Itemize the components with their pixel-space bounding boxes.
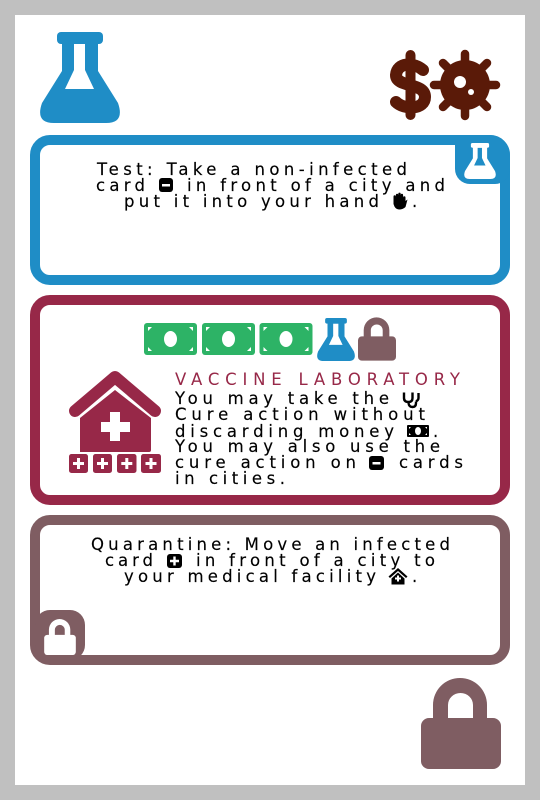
text: quarantine rule: .: [412, 567, 417, 586]
panel: quarantine: [35, 520, 505, 660]
text: vaccine laboratory rule: cure action on: [175, 453, 356, 472]
text: quarantine rule: your medical facility: [124, 567, 376, 586]
text: test rule: in front of a city and: [187, 176, 445, 195]
text: vaccine laboratory rule: cards: [399, 453, 463, 472]
text: test rule: [96, 160, 445, 211]
heading: vaccine laboratory: VACCINE LABORATORY: [175, 370, 461, 389]
panel: vaccine laboratory: [35, 300, 505, 500]
text: test rule: Test: Take a non-infected: [96, 160, 407, 179]
icon: large flask: [40, 32, 120, 123]
text: test rule: put it into your hand: [124, 192, 379, 211]
icon: dollar sign: [396, 55, 425, 115]
icon: virus: [434, 54, 496, 116]
text: quarantine rule: [91, 535, 450, 586]
cost: money, flask, lock: [144, 317, 396, 361]
text: quarantine rule: Quarantine: Move an infected: [91, 535, 450, 554]
text: vaccine laboratory rule: [174, 389, 463, 488]
text: vaccine laboratory rule: .: [433, 422, 438, 441]
icon: medical facility with cards: [69, 377, 161, 473]
text: vaccine laboratory rule: Cure action without: [175, 405, 426, 424]
icon: money and virus: [396, 54, 496, 116]
text: test rule: .: [412, 192, 417, 211]
icon: large lock: [421, 678, 501, 769]
text: quarantine rule: card: [105, 551, 153, 570]
text: vaccine laboratory rule: You may take the: [174, 389, 389, 408]
corner tab: flask: [455, 135, 510, 184]
corner tab: lock: [35, 610, 85, 660]
text: test rule: card: [96, 176, 145, 195]
text: vaccine laboratory rule: in cities.: [175, 469, 285, 488]
text: vaccine laboratory rule: discarding money: [175, 422, 394, 441]
text: vaccine laboratory rule: You may also use the: [174, 437, 440, 456]
panel: test: [35, 135, 510, 280]
text: quarantine rule: in front of a city to: [196, 551, 435, 570]
